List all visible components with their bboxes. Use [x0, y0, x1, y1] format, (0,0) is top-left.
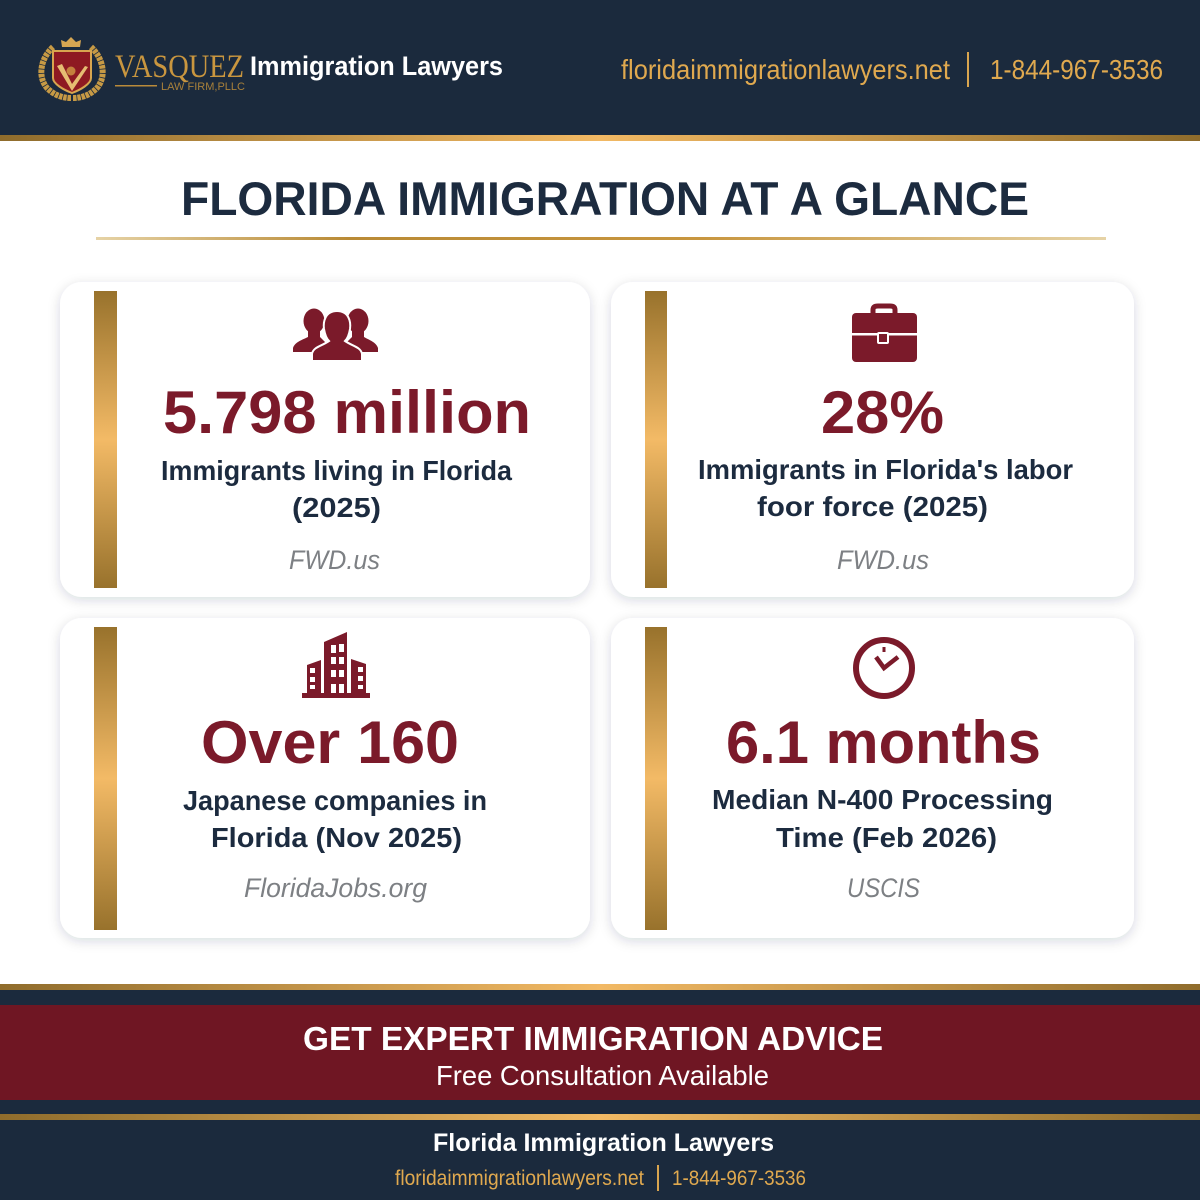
call to action banner: [0, 984, 1200, 1120]
panel: immigrants living in Florida: [60, 282, 590, 597]
icon: people: [293, 308, 378, 361]
icon: briefcase: [852, 306, 917, 362]
description: [161, 455, 512, 523]
wordmark: Vasquez: VASQUEZ: [115, 49, 244, 85]
description: [183, 785, 487, 853]
wordmark: law firm: LAW FIRM,PLLC: [161, 81, 245, 93]
banner subheading: Free Consultation Available: [436, 1060, 769, 1091]
description: Florida (Nov 2025): [211, 822, 462, 853]
phone: 1-844-967-3536: [990, 54, 1163, 85]
logo: Vasquez Law Firm crest and wordmark: [41, 37, 503, 98]
icon: buildings: [302, 632, 370, 698]
panel: labor force: [611, 282, 1134, 597]
description: [712, 784, 1053, 853]
header band: [0, 0, 1200, 141]
icon: crest with laurel and crown: [41, 37, 103, 98]
statistic: 6.1 months: [726, 709, 1041, 776]
footer firm name: Florida Immigration Lawyers: [433, 1129, 774, 1157]
website: floridaimmigrationlawyers.net: [621, 54, 950, 85]
source: USCIS: [847, 873, 920, 903]
source: FloridaJobs.org: [244, 873, 427, 903]
source: FWD.us: [837, 545, 929, 575]
description: [698, 454, 1073, 522]
title: FLORIDA IMMIGRATION AT A GLANCE: [181, 172, 1029, 225]
header contact details: [621, 52, 1163, 87]
statistic: 5.798 million: [163, 379, 531, 446]
panel: Japanese companies: [60, 618, 590, 938]
description: Time (Feb 2026): [776, 822, 997, 853]
source: FWD.us: [289, 545, 380, 575]
footer: [0, 1120, 1200, 1200]
description: foor force (2025): [757, 491, 988, 522]
panel: N-400 processing time: [611, 618, 1134, 938]
banner heading: GET EXPERT IMMIGRATION ADVICE: [303, 1020, 883, 1057]
footer website: floridaimmigrationlawyers.net: [395, 1167, 644, 1190]
description: (2025): [292, 492, 381, 523]
description: Immigrants in Florida's labor: [698, 454, 1073, 485]
wordmark rule: [115, 85, 157, 86]
description: Immigrants living in Florida: [161, 455, 512, 486]
icon: clock: [856, 640, 912, 696]
wordmark: Immigration Lawyers: Immigration Lawyers: [250, 51, 503, 81]
description: Median N-400 Processing: [712, 784, 1053, 815]
description: Japanese companies in: [183, 785, 487, 816]
statistic: Over 160: [201, 709, 459, 776]
statistic: 28%: [821, 379, 944, 446]
footer phone: 1-844-967-3536: [672, 1167, 806, 1190]
